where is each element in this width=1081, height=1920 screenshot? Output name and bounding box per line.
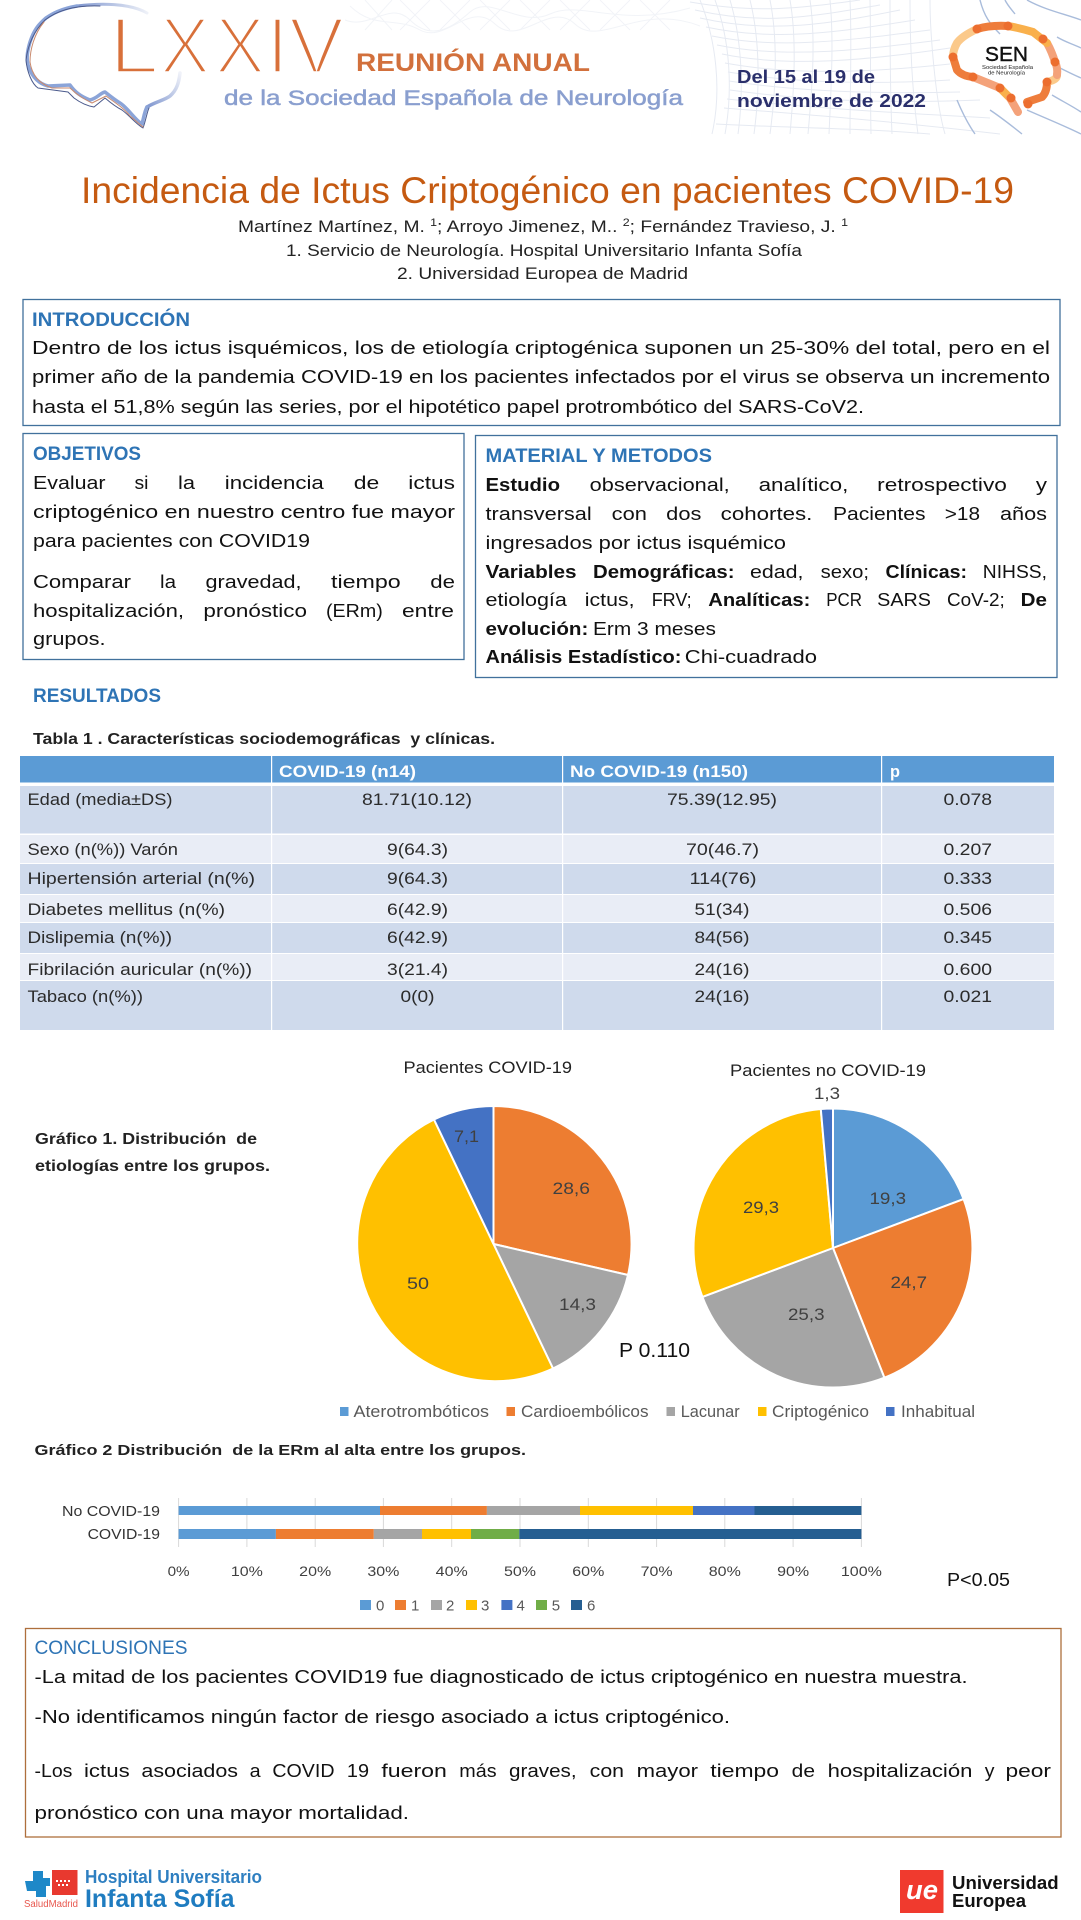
text block: material y metodos: edad, xyxy=(750,561,803,582)
text block: objetivos: entre xyxy=(402,600,454,621)
text block: material y metodos: analítico, xyxy=(759,474,848,495)
text block: objetivos: (ERm) xyxy=(326,600,383,621)
bar: no COVID-19 xyxy=(179,1506,861,1515)
text block: conclusiones: a xyxy=(250,1760,261,1781)
text block: objetivos: grupos. xyxy=(33,628,106,649)
text block: objetivos: la xyxy=(160,571,177,592)
authors and affiliations xyxy=(238,217,848,283)
text block: material y metodos: Estudio xyxy=(486,474,560,495)
p value: bar chart: P<0.05 xyxy=(947,1570,1010,1590)
heading: objetivos: OBJETIVOS xyxy=(33,444,141,465)
percentage axis: 10% xyxy=(231,1563,263,1579)
event name: REUNIÓN ANUAL xyxy=(356,47,590,77)
text block: objetivos: para pacientes con COVID19 xyxy=(33,530,310,551)
text block: material y metodos: Variables xyxy=(486,561,577,582)
event number: V xyxy=(289,1,345,90)
table values: p xyxy=(944,791,992,1006)
legend: etiologías: Lacunar xyxy=(681,1403,740,1421)
logo: Universidad Europea: Universidad xyxy=(952,1872,1059,1893)
data labels: 29,3 xyxy=(743,1198,779,1217)
panel: conclusiones xyxy=(26,1628,1061,1837)
text block: objetivos: de xyxy=(430,571,455,592)
legend: ERm: 1 xyxy=(411,1598,419,1614)
table row labels: Dislipemia (n(%)) xyxy=(28,929,172,947)
legend: ERm: 0 xyxy=(376,1598,384,1614)
table values: no COVID-19: 114(76) xyxy=(690,870,756,888)
heading: resultados: RESULTADOS xyxy=(33,686,161,707)
data labels: 50 xyxy=(407,1274,429,1293)
event number: L xyxy=(109,1,159,90)
text block: conclusiones: de xyxy=(792,1760,815,1781)
dates xyxy=(737,67,926,111)
text block: material y metodos: SARS xyxy=(877,589,931,610)
text block: conclusiones: pronóstico con una mayor mortalidad. xyxy=(34,1802,409,1823)
table values: p: 0.333 xyxy=(944,870,992,888)
text block: conclusiones: graves, xyxy=(509,1760,577,1781)
text block: introducción: primer año de la pandemia COVID-19 en los pacientes infectados por el virus se observa un incremento xyxy=(32,366,1050,387)
data labels: 25,3 xyxy=(788,1305,824,1324)
table row labels: Fibrilación auricular (n(%)) xyxy=(28,961,252,979)
heading: material y metodos: MATERIAL Y METODOS xyxy=(486,446,712,467)
icon: brain outline xyxy=(26,4,180,128)
text block: objetivos xyxy=(33,472,455,649)
percentage axis: 70% xyxy=(641,1563,673,1579)
text block: material y metodos: observacional, xyxy=(590,474,730,495)
text block: material y metodos: Pacientes xyxy=(833,503,926,524)
text block: material y metodos: Demográficas: xyxy=(593,561,734,582)
logo: Universidad Europea xyxy=(900,1870,1059,1913)
table row labels: Tabaco (n(%)) xyxy=(28,988,143,1006)
authors and affiliations: ; Arroyo Jimenez, M.. xyxy=(437,217,623,236)
text block: material y metodos: con xyxy=(612,503,647,524)
text block: material y metodos: PCR xyxy=(826,589,862,610)
text block: conclusiones: y xyxy=(985,1760,995,1781)
table values: COVID-19: 9(64.3) xyxy=(387,841,448,859)
category labels xyxy=(62,1503,160,1543)
table values: p: 0.600 xyxy=(944,961,992,979)
text block: objetivos: hospitalización, xyxy=(33,600,184,621)
table header xyxy=(279,763,900,781)
text block: material y metodos: Análisis Estadístico: xyxy=(486,646,681,667)
table row labels xyxy=(28,791,255,1006)
text block: conclusiones: hospitalización xyxy=(828,1760,972,1781)
percentage axis: 50% xyxy=(504,1563,536,1579)
text block: conclusiones: -No identificamos ningún factor de riesgo asociado a ictus criptogénico. xyxy=(34,1706,730,1727)
text block: material y metodos: dos xyxy=(666,503,701,524)
legend: ERm: 2 xyxy=(446,1598,454,1614)
category labels: No COVID-19 xyxy=(62,1503,160,1520)
table row labels: Edad (media±DS) xyxy=(28,791,172,809)
table header: No COVID-19 (n150) xyxy=(570,763,748,781)
society name: de la Sociedad Española de Neurología xyxy=(224,87,683,110)
text block: material y metodos: CoV-2; xyxy=(947,589,1005,610)
authors and affiliations: 1 xyxy=(841,217,848,229)
data labels: 7,1 xyxy=(454,1127,479,1146)
text block: conclusiones: -Los xyxy=(34,1760,72,1781)
text block: introducción xyxy=(32,337,1050,417)
logo: Universidad Europea: ue xyxy=(906,1875,938,1905)
logo: Hospital Universitario Infanta Sofía: Infanta Sofía xyxy=(85,1885,236,1913)
dates: noviembre de 2022 xyxy=(737,91,926,111)
authors and affiliations: 1 xyxy=(430,217,437,229)
text block: material y metodos: Analíticas: xyxy=(708,589,810,610)
table values: no COVID-19: 51(34) xyxy=(694,901,750,919)
logo: Universidad Europea: Europea xyxy=(952,1890,1027,1911)
percentage axis: 100% xyxy=(841,1563,882,1579)
legend: ERm: 6 xyxy=(587,1598,595,1614)
data labels: 24,7 xyxy=(890,1273,927,1292)
table values: p: 0.207 xyxy=(944,841,992,859)
text block: material y metodos: evolución: xyxy=(486,618,588,639)
text block: objetivos: gravedad, xyxy=(206,571,302,592)
text block: material y metodos: Clínicas: xyxy=(886,561,967,582)
table values: no COVID-19: 24(16) xyxy=(694,988,750,1006)
pie chart: pacientes COVID-19 xyxy=(357,1058,632,1381)
pie chart: pacientes no COVID-19 xyxy=(694,1061,972,1387)
table values: COVID-19: 81.71(10.12) xyxy=(362,791,472,809)
SEN logo: SEN xyxy=(985,44,1028,66)
event number: I xyxy=(266,1,288,90)
text block: material y metodos: retrospectivo xyxy=(877,474,1007,495)
data labels: 19,3 xyxy=(870,1189,906,1208)
text block: material y metodos: >18 xyxy=(945,503,980,524)
icon: red square xyxy=(52,1870,78,1895)
legend: ERm: 4 xyxy=(516,1598,525,1614)
text block: material y metodos: años xyxy=(1000,503,1047,524)
authors and affiliations: 2 xyxy=(623,217,630,229)
event number xyxy=(109,1,345,90)
text block: conclusiones: asociados xyxy=(141,1760,238,1781)
stacked bar chart: ERm al alta xyxy=(62,1498,882,1614)
percentage axis: 30% xyxy=(367,1563,399,1579)
title: Incidencia de Ictus Criptogénico en pacientes COVID-19 xyxy=(81,170,1014,211)
text block: material y metodos: NIHSS, xyxy=(983,561,1047,582)
authors and affiliations: 1. Servicio de Neurología. Hospital Universitario Infanta Sofía xyxy=(286,241,803,260)
table values: no COVID-19: 84(56) xyxy=(694,929,750,947)
text block: conclusiones: peor xyxy=(1006,1760,1051,1781)
SEN logo: de Neurología xyxy=(988,70,1025,76)
table values: COVID-19: 3(21.4) xyxy=(387,961,448,979)
table values: no COVID-19: 75.39(12.95) xyxy=(667,791,777,809)
percentage axis: 20% xyxy=(299,1563,331,1579)
data labels: 14,3 xyxy=(559,1295,596,1314)
text block: material y metodos: etiología xyxy=(486,589,568,610)
percentage axis: 90% xyxy=(777,1563,809,1579)
SEN logo xyxy=(948,22,1060,112)
panel: introducción xyxy=(23,300,1060,426)
text block: material y metodos: FRV; xyxy=(652,589,692,610)
text block: introducción: hasta el 51,8% según las series, por el hipotético papel protrombótico del SARS-CoV2. xyxy=(32,396,864,417)
text block: material y metodos: ingresados por ictus isquémico xyxy=(486,532,786,553)
authors and affiliations: Martínez Martínez, M. xyxy=(238,217,403,236)
table values: COVID-19 xyxy=(362,791,472,1006)
caption: gráfico 1: Gráfico 1. Distribución de xyxy=(35,1131,257,1148)
legend: etiologías: Criptogénico xyxy=(772,1403,869,1421)
percentage axis: 80% xyxy=(709,1563,741,1579)
table values: p: 0.345 xyxy=(944,929,992,947)
panel: objetivos xyxy=(23,434,464,660)
table: características sociodemográficas y clínicas xyxy=(20,756,1054,1030)
text block: material y metodos: Erm 3 meses xyxy=(593,618,716,639)
category labels: COVID-19 xyxy=(88,1526,160,1543)
percentage axis: 0% xyxy=(168,1563,190,1579)
text block: material y metodos: Chi-cuadrado xyxy=(685,646,817,667)
heading: introducción: INTRODUCCIÓN xyxy=(32,309,190,331)
data labels: 1,3 xyxy=(814,1084,840,1103)
heading: tabla 1: Tabla 1 . Características sociodemográficas y clínicas. xyxy=(33,731,495,748)
data labels: 28,6 xyxy=(552,1179,590,1198)
legend: ERm xyxy=(360,1598,595,1614)
text block: objetivos: Comparar xyxy=(33,571,131,592)
text block: material y metodos: De xyxy=(1021,589,1047,610)
text block: objetivos: ictus xyxy=(408,472,455,493)
legend: etiologías: Inhabitual xyxy=(901,1403,975,1421)
table values: COVID-19: 6(42.9) xyxy=(387,929,448,947)
text block: introducción: Dentro de los ictus isquémicos, los de etiología criptogénica suponen un 25-30% del total, pero en el xyxy=(32,337,1050,358)
authors and affiliations: ; Fernández Travieso, J. xyxy=(630,217,841,236)
table values: COVID-19: 6(42.9) xyxy=(387,901,448,919)
table values: p: 0.506 xyxy=(944,901,992,919)
chart title: Pacientes COVID-19 xyxy=(404,1058,572,1077)
percentage axis xyxy=(168,1563,882,1579)
text block: material y metodos: sexo; xyxy=(821,561,869,582)
legend: etiologías xyxy=(340,1403,975,1421)
logo: Hospital Universitario Infanta Sofía: SaludMadrid xyxy=(24,1899,78,1910)
chart title: Pacientes no COVID-19 xyxy=(730,1061,926,1080)
data labels xyxy=(743,1084,927,1324)
text block: conclusiones xyxy=(34,1666,1051,1823)
text block: material y metodos: transversal xyxy=(486,503,592,524)
table header: COVID-19 (n14) xyxy=(279,763,416,781)
table values: no COVID-19: 70(46.7) xyxy=(686,841,759,859)
table row labels: Diabetes mellitus (n(%) xyxy=(28,901,225,919)
table values: COVID-19: 9(64.3) xyxy=(387,870,448,888)
icon: blue cross xyxy=(25,1871,50,1897)
text block: objetivos: Evaluar xyxy=(33,472,106,493)
text block: objetivos: criptogénico en nuestro centro fue mayor xyxy=(33,501,455,522)
text block: material y metodos: y xyxy=(1036,474,1048,495)
legend: etiologías: Cardioembólicos xyxy=(521,1403,648,1421)
table row labels: Sexo (n(%)) Varón xyxy=(28,841,178,859)
event number: X xyxy=(160,1,210,90)
text block: objetivos: de xyxy=(354,472,379,493)
logo: Hospital Universitario Infanta Sofía xyxy=(24,1867,262,1913)
text block: conclusiones: tiempo xyxy=(710,1760,779,1781)
table header: p xyxy=(890,763,900,781)
authors and affiliations: 2. Universidad Europea de Madrid xyxy=(397,264,688,283)
legend: etiologías: Aterotrombóticos xyxy=(354,1403,489,1421)
text block: material y metodos xyxy=(486,474,1048,667)
text block: conclusiones: mayor xyxy=(637,1760,698,1781)
text block: objetivos: pronóstico xyxy=(203,600,307,621)
table row labels: Hipertensión arterial (n(%) xyxy=(28,870,255,888)
text block: conclusiones: con xyxy=(590,1760,624,1781)
table values: p: 0.078 xyxy=(944,791,992,809)
bar: COVID-19 xyxy=(179,1529,861,1539)
p value: pie charts: P 0.110 xyxy=(619,1340,690,1362)
text block: material y metodos: cohortes. xyxy=(721,503,812,524)
event number: X xyxy=(215,1,265,90)
table values: p: 0.021 xyxy=(944,988,992,1006)
text block: objetivos: la xyxy=(178,472,196,493)
text block: objetivos: incidencia xyxy=(225,472,325,493)
legend: ERm: 3 xyxy=(481,1598,489,1614)
text block: objetivos: tiempo xyxy=(331,571,401,592)
table values: no COVID-19 xyxy=(667,791,777,1006)
text block: conclusiones: 19 xyxy=(347,1760,369,1781)
SEN logo: Sociedad Española xyxy=(982,65,1033,71)
percentage axis: 40% xyxy=(436,1563,468,1579)
header banner xyxy=(26,0,1081,134)
text block: conclusiones: más xyxy=(459,1760,497,1781)
dates: Del 15 al 19 de xyxy=(737,67,875,87)
heading: conclusiones: CONCLUSIONES xyxy=(34,1638,188,1659)
text block: objetivos: si xyxy=(134,472,148,493)
caption: gráfico 1: etiologías entre los grupos. xyxy=(35,1158,270,1175)
text block: material y metodos: ictus, xyxy=(585,589,634,610)
text block: conclusiones: COVID xyxy=(272,1760,334,1781)
legend: ERm: 5 xyxy=(552,1598,560,1614)
data labels xyxy=(407,1127,596,1314)
table values: no COVID-19: 24(16) xyxy=(694,961,750,979)
text block: conclusiones: ictus xyxy=(84,1760,130,1781)
panel: material y metodos xyxy=(476,436,1057,678)
table values: COVID-19: 0(0) xyxy=(400,988,434,1006)
percentage axis: 60% xyxy=(572,1563,604,1579)
caption: gráfico 1 xyxy=(35,1131,270,1175)
logo: Hospital Universitario Infanta Sofía: Hospital Universitario xyxy=(85,1867,262,1887)
text block: conclusiones: -La mitad de los pacientes COVID19 fue diagnosticado de ictus criptogénico en nuestra muestra. xyxy=(34,1666,968,1687)
text block: conclusiones: fueron xyxy=(381,1760,447,1781)
caption: gráfico 2: Gráfico 2 Distribución de la ERm al alta entre los grupos. xyxy=(34,1442,526,1459)
